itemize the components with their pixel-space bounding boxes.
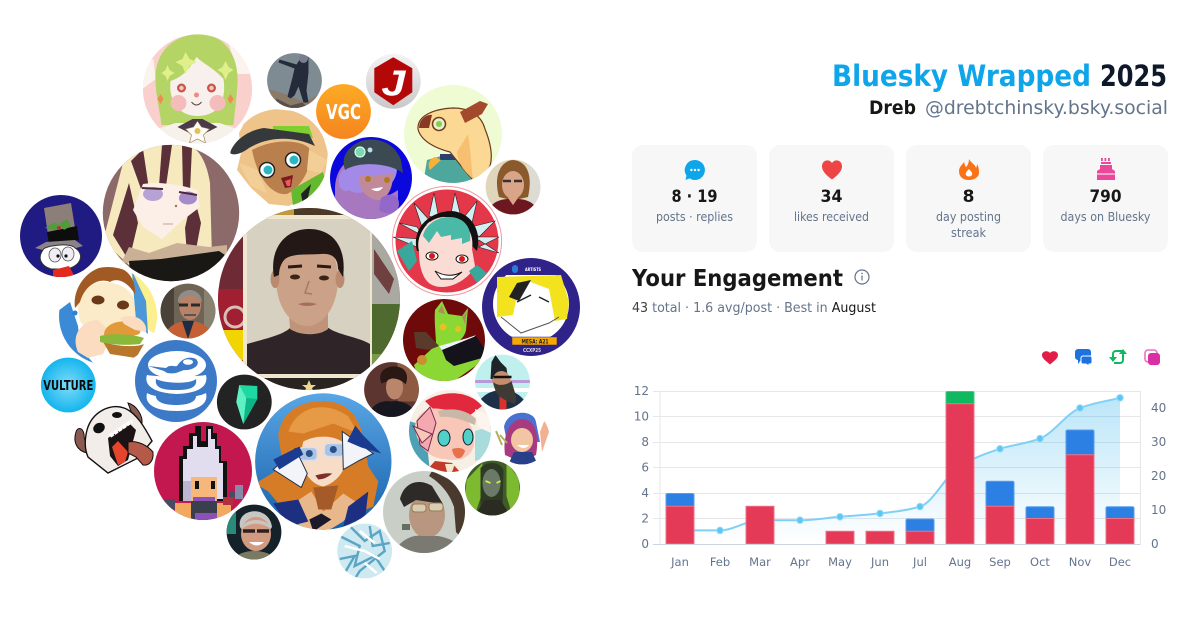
avatar: main profile photo [218, 208, 400, 393]
bars: red likes [666, 404, 1134, 544]
panel: posting streak [906, 145, 1031, 252]
month labels: Feb [710, 555, 730, 569]
month labels: Mar [749, 555, 771, 569]
avatar: green gem [217, 375, 272, 429]
user name and handle: Dreb [869, 97, 916, 119]
month labels: May [828, 555, 852, 569]
avatar: older woman smiling [226, 504, 282, 560]
line points [677, 394, 1123, 534]
baseline [653, 544, 1140, 546]
user name and handle: @drebtchinsky.bsky.social [925, 97, 1168, 119]
month labels: Dec [1109, 555, 1131, 569]
right axis labels [1151, 401, 1166, 551]
chart legend [1042, 349, 1160, 366]
avatar: yellow-haired manga panel badge: ARTISTS [525, 267, 541, 273]
left axis labels: 2 [641, 512, 649, 526]
left axis labels: 12 [634, 384, 649, 398]
left axis labels: 0 [641, 537, 649, 551]
avatar: green cat with fur collar [403, 299, 485, 381]
panel: posts and replies [632, 145, 757, 252]
icon: speech bubble [685, 160, 705, 180]
right axis labels: 10 [1151, 503, 1166, 517]
avatar: orange-haired woman with glasses [253, 392, 393, 536]
avatar: woman with glasses [485, 159, 541, 215]
avatar: Vulture logo [41, 358, 96, 412]
panel: posts and replies: 8 · 19 [672, 187, 718, 207]
avatar: red hexagon J logo [366, 54, 421, 109]
icon: horned skull sticker [75, 403, 153, 473]
title: 2025 [1100, 59, 1167, 93]
icon: likes [1042, 351, 1058, 364]
left axis labels: 10 [634, 410, 649, 424]
icon: heart [822, 160, 842, 180]
avatar: bearded man [474, 354, 530, 410]
avatar: yellow-haired manga panel badge [481, 257, 581, 357]
avatar: purple-haired woman drawing [495, 412, 549, 464]
right axis labels: 40 [1151, 401, 1166, 415]
grid lines [653, 391, 1140, 544]
title: Bluesky Wrapped [832, 59, 1091, 93]
month labels: Oct [1030, 555, 1050, 569]
panel: days on Bluesky: 790 [1090, 187, 1122, 207]
avatar: man with cap and glasses [383, 471, 465, 553]
avatar: green-capped tan girl [230, 109, 328, 206]
panel: likes received: likes received [794, 209, 869, 224]
avatar: Bugs Bunny with top hat [20, 195, 102, 277]
avatar: pale blue ice texture [337, 523, 393, 579]
right axis labels: 0 [1151, 537, 1159, 551]
engagement summary: 43 total · 1.6 avg/post · Best in August [632, 300, 876, 316]
avatar: yellow creature [403, 84, 503, 184]
panel: likes received: 34 [820, 187, 843, 207]
panel: posting streak: streak [951, 225, 987, 240]
left axis labels: 8 [641, 435, 649, 449]
avatar: Chun-Li eating a burger [58, 266, 158, 366]
avatar: VGC orange logo [316, 84, 371, 139]
month labels [670, 555, 1131, 569]
month labels: Aug [949, 555, 971, 569]
avatar: yellow-haired manga panel badge: MESA: A21 [522, 338, 548, 346]
bars: blue and green tops [666, 392, 1134, 532]
avatar: red sunburst teal-haired girl [392, 186, 502, 296]
avatar: green-glow dark elf [464, 460, 520, 516]
avatar: purple-haired girl with cap [330, 137, 412, 219]
right axis labels: 30 [1151, 435, 1166, 449]
month labels: Apr [790, 555, 810, 569]
icon: info [855, 270, 869, 284]
avatar: Vulture logo: VULTURE [43, 379, 93, 394]
icon: reposts [1109, 349, 1127, 363]
icon: quotes [1145, 350, 1160, 365]
panel: posting streak: day posting [936, 209, 1001, 224]
icon: birthday cake [1097, 158, 1115, 180]
panel: days on Bluesky: days on Bluesky [1060, 209, 1151, 224]
avatar: older man with glasses [160, 283, 216, 339]
month labels: Jun [870, 555, 889, 569]
chart: monthly engagement [634, 384, 1166, 569]
left axis labels: 6 [641, 460, 649, 474]
line: cumulative engagement [680, 398, 1120, 530]
panel: days on Bluesky [1043, 145, 1168, 252]
avatar: yellow-haired manga panel badge: CCXP25 [523, 348, 541, 354]
avatar: Santa-hat elf girl [409, 390, 491, 472]
month labels: Jul [912, 555, 927, 569]
left axis labels: 4 [641, 486, 649, 500]
month labels: Sep [989, 555, 1011, 569]
right axis labels: 20 [1151, 469, 1166, 483]
avatar: curly-haired young man [364, 362, 420, 418]
avatar: VGC orange logo: VGC [326, 100, 361, 124]
panel: likes received [769, 145, 894, 252]
avatar: blonde anime girl [101, 143, 241, 283]
month labels: Jan [670, 555, 689, 569]
panel: posts and replies: posts · replies [656, 209, 733, 224]
panel: posting streak: 8 [963, 187, 974, 207]
avatar: red hexagon J logo: J [381, 62, 406, 103]
area: cumulative fill [680, 398, 1120, 544]
avatar: pixel-art white-haired character [153, 421, 253, 521]
icon: flame [959, 159, 979, 180]
avatar: person on a shore [266, 52, 322, 108]
avatar collage [20, 34, 581, 579]
month labels: Nov [1069, 555, 1091, 569]
left axis labels [634, 384, 649, 551]
heading: your engagement: Your Engagement [631, 266, 843, 292]
avatar: green-haired anime girl [142, 34, 252, 144]
icon: replies [1075, 349, 1092, 366]
avatar: Steam stacked logo [135, 340, 217, 422]
